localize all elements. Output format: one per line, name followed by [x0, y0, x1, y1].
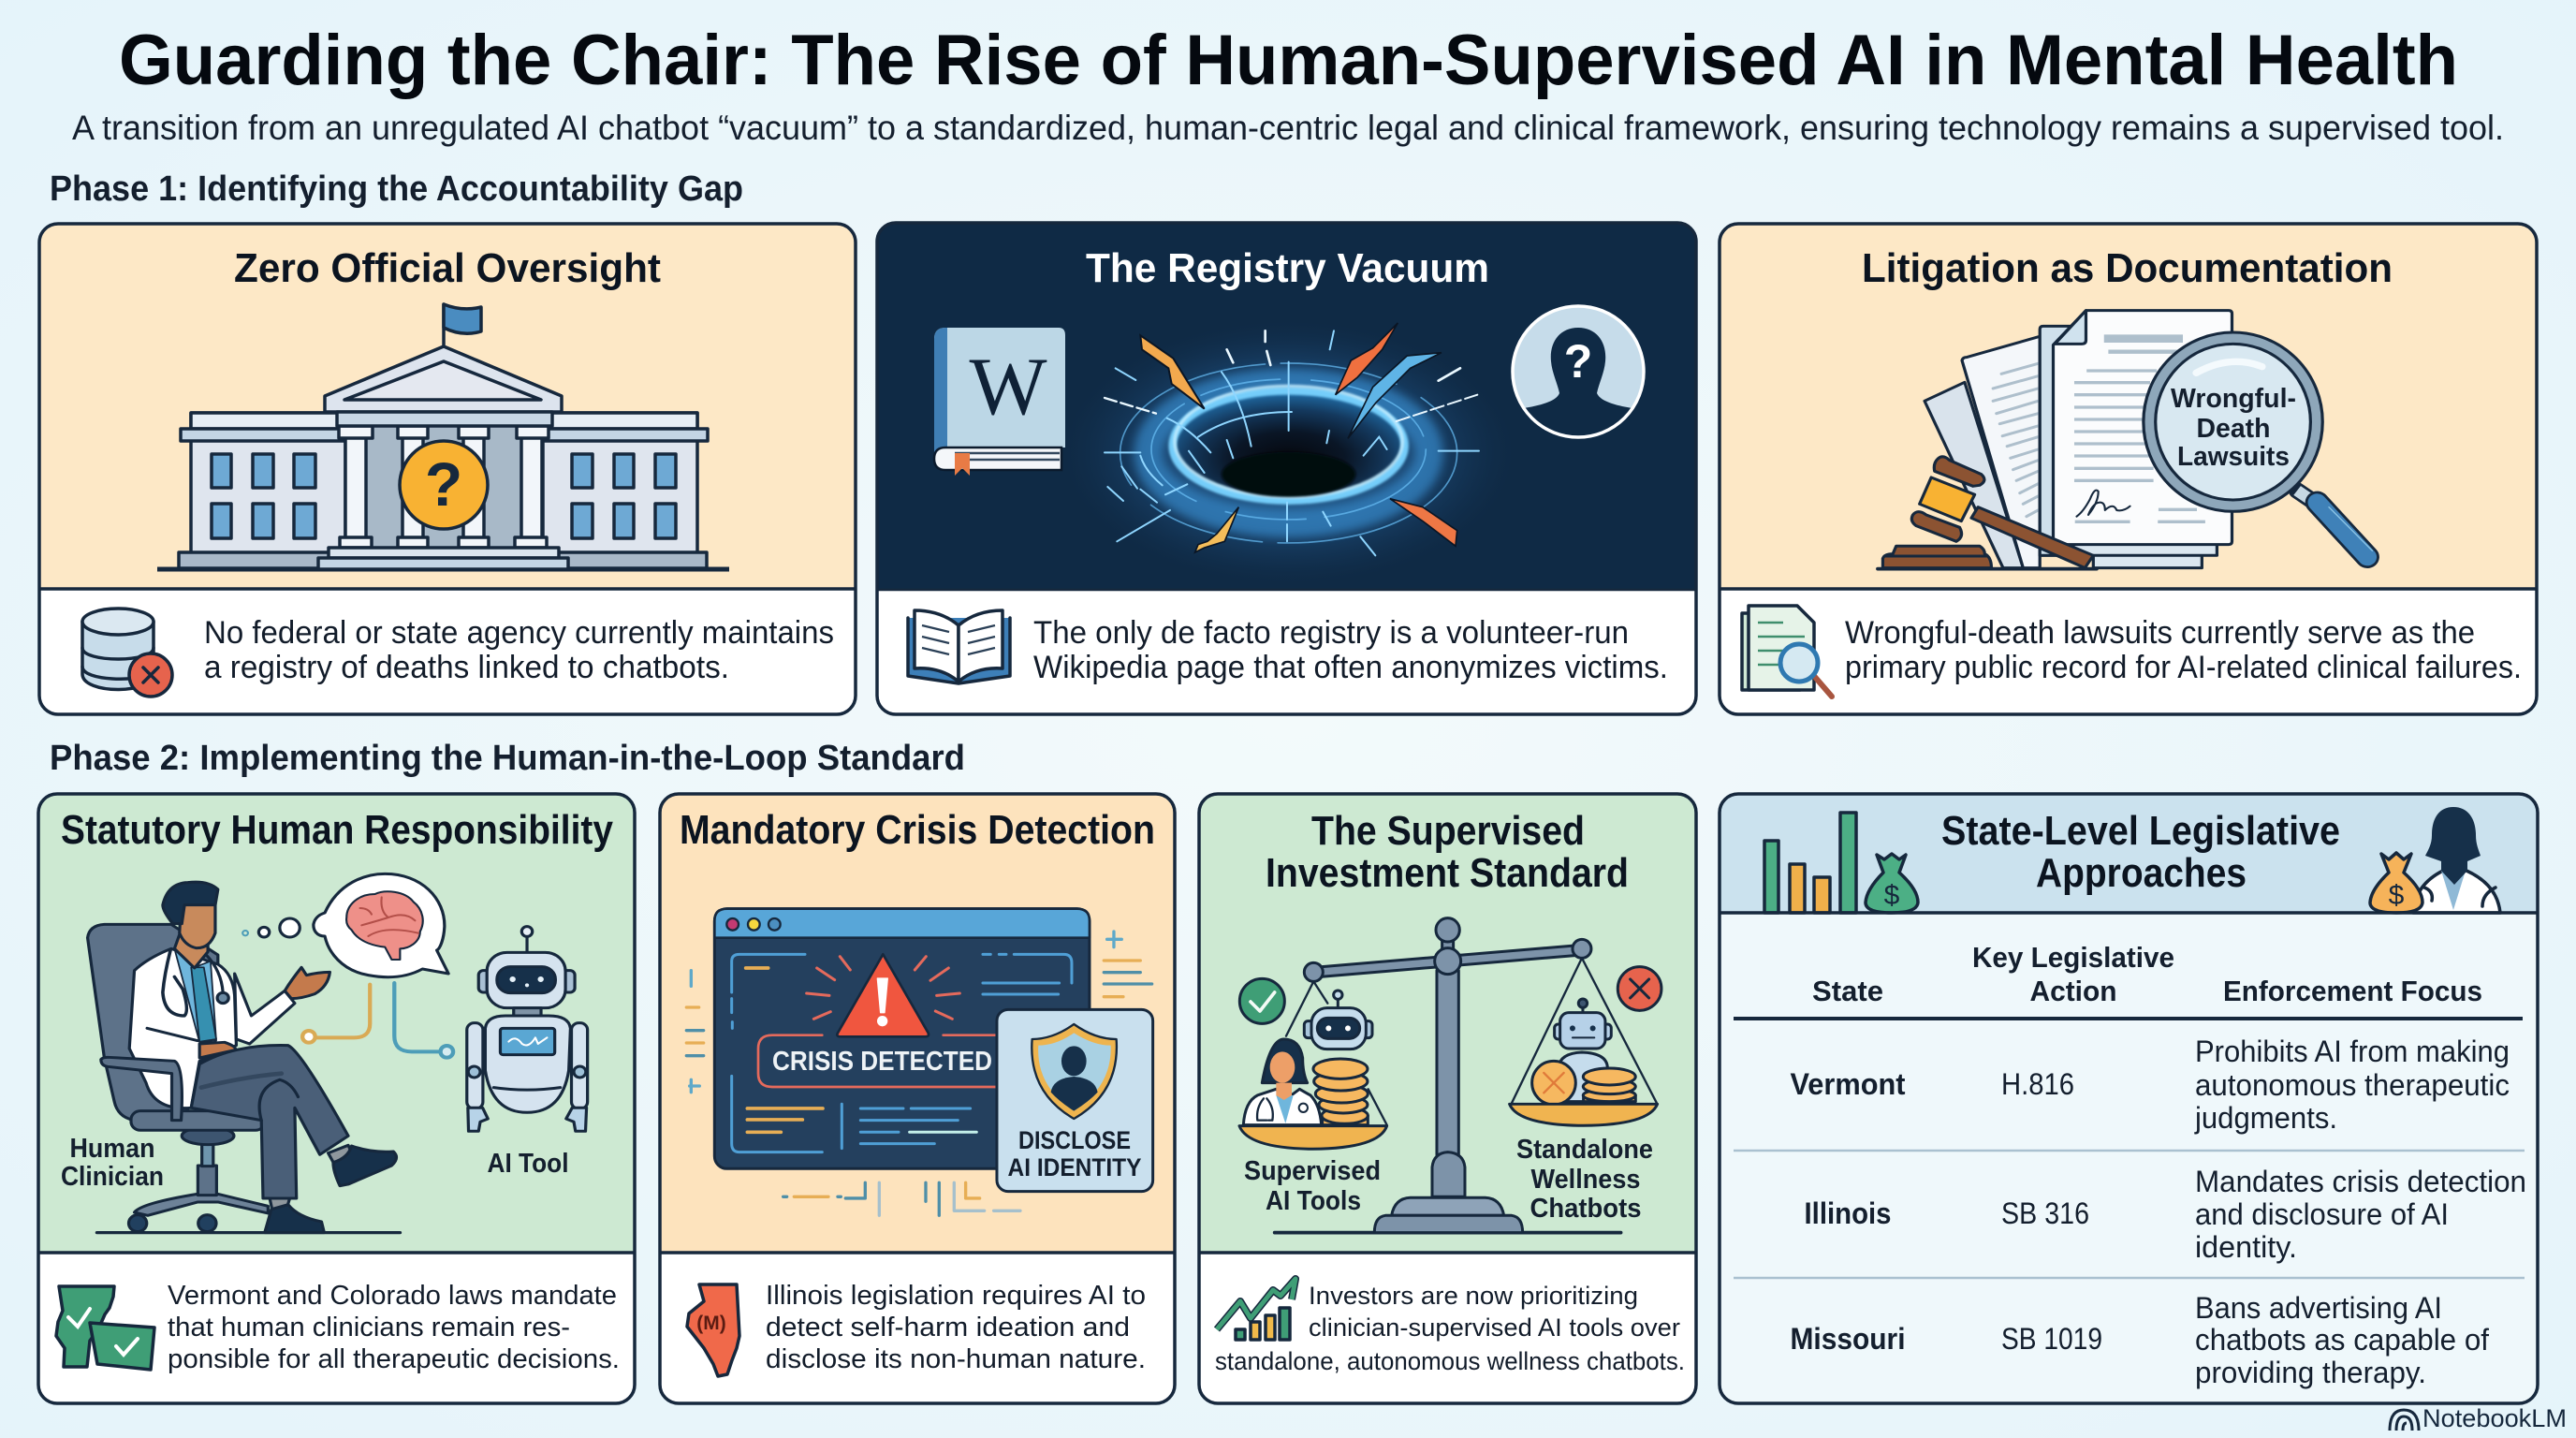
icon: glowing vacuum vortex	[1064, 321, 1514, 583]
text: investment description	[1215, 1282, 1685, 1375]
panel: mandatory crisis detection	[660, 794, 1175, 1403]
text: crisis detected: CRISIS DETECTED	[772, 1047, 992, 1077]
text: human clinician label: Clinician	[61, 1162, 164, 1192]
text: human clinician label: Human	[69, 1134, 155, 1164]
text: standalone wellness chatbots label: Chatbots	[1530, 1194, 1642, 1224]
text: investment description: standalone, autonomous wellness chatbots.	[1215, 1347, 1685, 1375]
table row: illinois: Illinois	[1805, 1196, 1891, 1230]
table row: vermont: H.816	[2001, 1067, 2074, 1101]
text: ai tool label: AI Tool	[487, 1149, 569, 1179]
icon: wikipedia book: W	[969, 342, 1047, 433]
text: crisis description: detect self-harm ideation and	[766, 1313, 1130, 1343]
heading: phase 2: Phase 2: Implementing the Human-in-the-Loop Standard	[50, 739, 965, 778]
panel: statutory human responsibility	[38, 794, 635, 1403]
icon: anonymous avatar: ?	[1564, 335, 1592, 388]
heading: the supervised investment standard: The Supervised	[1311, 808, 1585, 854]
text: registry description	[1033, 615, 1668, 685]
table row: missouri: chatbots as capable of	[2195, 1323, 2489, 1357]
table row: illinois	[1805, 1165, 2526, 1264]
text: supervised ai tools label	[1244, 1156, 1381, 1216]
text: human clinician label	[61, 1134, 164, 1192]
heading: mandatory crisis detection: Mandatory Crisis Detection	[680, 807, 1155, 853]
heading: statutory human responsibility: Statutory Human Responsibility	[61, 807, 613, 853]
icon: document with magnifier	[1742, 606, 1832, 697]
text: standalone wellness chatbots label	[1516, 1135, 1653, 1224]
table row: illinois: identity.	[2195, 1230, 2297, 1264]
icon: database with error badge	[82, 609, 172, 697]
text: supervised ai tools label: Supervised	[1244, 1156, 1381, 1186]
table row: illinois: SB 316	[2001, 1196, 2089, 1230]
text: crisis description: disclose its non-human nature.	[766, 1344, 1146, 1374]
text: statutory description: Vermont and Colorado laws mandate	[168, 1281, 617, 1311]
text: magnifier label: Wrongful-	[2171, 384, 2296, 414]
table row: vermont: Prohibits AI from making	[2195, 1034, 2510, 1068]
heading: the registry vacuum: The Registry Vacuum	[1086, 245, 1489, 291]
icon: anonymous avatar	[1513, 306, 1644, 437]
heading: the supervised investment standard	[1266, 808, 1629, 896]
table row: vermont: autonomous therapeutic	[2195, 1068, 2510, 1102]
text: litigation description: primary public record for AI-related clinical failures.	[1845, 650, 2522, 685]
icon: open book	[908, 610, 1010, 683]
text: investment description: clinician-supervised AI tools over	[1309, 1313, 1680, 1342]
icon: supervised robot, clinician and coins	[1239, 990, 1387, 1149]
illustration: clinician in chair	[88, 873, 588, 1233]
card: disclose ai identity: AI IDENTITY	[1007, 1153, 1142, 1181]
notebooklm logo and wordmark: NotebookLM	[2422, 1404, 2567, 1432]
text: investment description: Investors are now prioritizing	[1309, 1282, 1638, 1310]
card: disclose ai identity: DISCLOSE	[1018, 1126, 1131, 1154]
text: oversight description	[204, 615, 834, 685]
table header: Key Legislative	[1972, 941, 2174, 974]
text: magnifier label: Lawsuits	[2177, 442, 2290, 472]
text: registry description: The only de facto registry is a volunteer-run	[1033, 615, 1629, 651]
illustration: balance scale	[1239, 918, 1661, 1233]
table header: Enforcement Focus	[2223, 975, 2482, 1007]
icon: government building with question mark: ?	[425, 449, 462, 519]
illustration: crisis alert window	[686, 909, 1153, 1215]
icon: brain	[346, 891, 423, 960]
icon: supervised check	[1239, 978, 1284, 1023]
icon: standalone cross	[1617, 967, 1661, 1010]
text: supervised ai tools label: AI Tools	[1266, 1186, 1361, 1216]
icon: clinician silhouette with gold money bag: $	[2389, 880, 2405, 911]
table header: State	[1812, 975, 1883, 1007]
text: magnifier label	[2171, 384, 2296, 472]
text: magnifier label: Death	[2196, 414, 2271, 444]
text: statutory description: ponsible for all therapeutic decisions.	[168, 1344, 620, 1374]
panel: litigation as documentation	[1720, 224, 2537, 714]
heading: litigation as documentation: Litigation as Documentation	[1862, 245, 2393, 291]
table row: illinois: Mandates crisis detection	[2195, 1165, 2526, 1198]
heading: phase 1: Phase 1: Identifying the Accountability Gap	[50, 169, 743, 209]
icon: growth arrow	[1217, 1279, 1295, 1340]
table row: vermont: Vermont	[1790, 1067, 1906, 1101]
text: statutory description	[168, 1281, 620, 1374]
icon: standalone robot and coins	[1510, 999, 1658, 1125]
text: crisis description: Illinois legislation requires AI to	[766, 1281, 1146, 1311]
table header	[1812, 941, 2482, 1007]
panel: supervised investment standard	[1199, 794, 1696, 1403]
text: oversight description: a registry of deaths linked to chatbots.	[204, 650, 729, 685]
table row: vermont: judgments.	[2194, 1101, 2337, 1135]
table row: missouri: providing therapy.	[2195, 1356, 2426, 1389]
table row: missouri: Missouri	[1790, 1322, 1906, 1356]
panel: state-level legislative approaches table	[1720, 794, 2538, 1403]
icon: clinician silhouette with gold money bag	[2370, 807, 2500, 913]
title: Guarding the Chair: The Rise of Human-Supervised AI in Mental Health	[119, 21, 2458, 100]
panel: registry vacuum	[877, 223, 1696, 714]
table row: missouri: SB 1019	[2001, 1322, 2102, 1356]
table header: Action	[2029, 975, 2117, 1007]
heading: state-level legislative approaches: Approaches	[2036, 850, 2247, 896]
icon: illinois state: (M)	[696, 1313, 726, 1334]
heading: state-level legislative approaches: State-Level Legislative	[1941, 808, 2340, 854]
heading: zero official oversight: Zero Official Oversight	[234, 245, 661, 291]
heading: the supervised investment standard: Investment Standard	[1266, 850, 1629, 896]
icon: vermont and colorado checks	[56, 1286, 154, 1370]
text: litigation description: Wrongful-death lawsuits currently serve as the	[1845, 615, 2475, 651]
card: disclose ai identity	[997, 1009, 1153, 1192]
heading: state-level legislative approaches	[1941, 808, 2340, 896]
text: standalone wellness chatbots label: Standalone	[1516, 1135, 1653, 1165]
text: oversight description: No federal or state agency currently maintains	[204, 615, 834, 651]
icon: wikipedia book	[934, 328, 1065, 476]
text: crisis description	[766, 1281, 1146, 1374]
panel: zero official oversight	[39, 224, 856, 714]
text: statutory description: that human clinicians remain res-	[168, 1313, 570, 1343]
text: litigation description	[1845, 615, 2522, 685]
text: registry description: Wikipedia page that often anonymizes victims.	[1033, 650, 1668, 685]
subtitle: A transition from an unregulated AI chatbot “vacuum” to a standardized, human-centric legal and clinical framework, ensuring technology remains a supervised tool.	[72, 109, 2504, 147]
table row: missouri: Bans advertising AI	[2195, 1291, 2442, 1325]
icon: illinois state	[687, 1284, 739, 1376]
icon: government building with question mark	[157, 304, 729, 569]
icon: documents, gavel and magnifier	[1878, 311, 2372, 569]
table row: missouri	[1790, 1291, 2489, 1389]
text: standalone wellness chatbots label: Wellness	[1531, 1165, 1640, 1195]
table row: vermont	[1790, 1034, 2510, 1135]
icon: bar chart and green money bag: $	[1884, 880, 1900, 911]
table row: illinois: and disclosure of AI	[2195, 1197, 2449, 1231]
icon: bar chart and green money bag	[1764, 813, 1918, 913]
